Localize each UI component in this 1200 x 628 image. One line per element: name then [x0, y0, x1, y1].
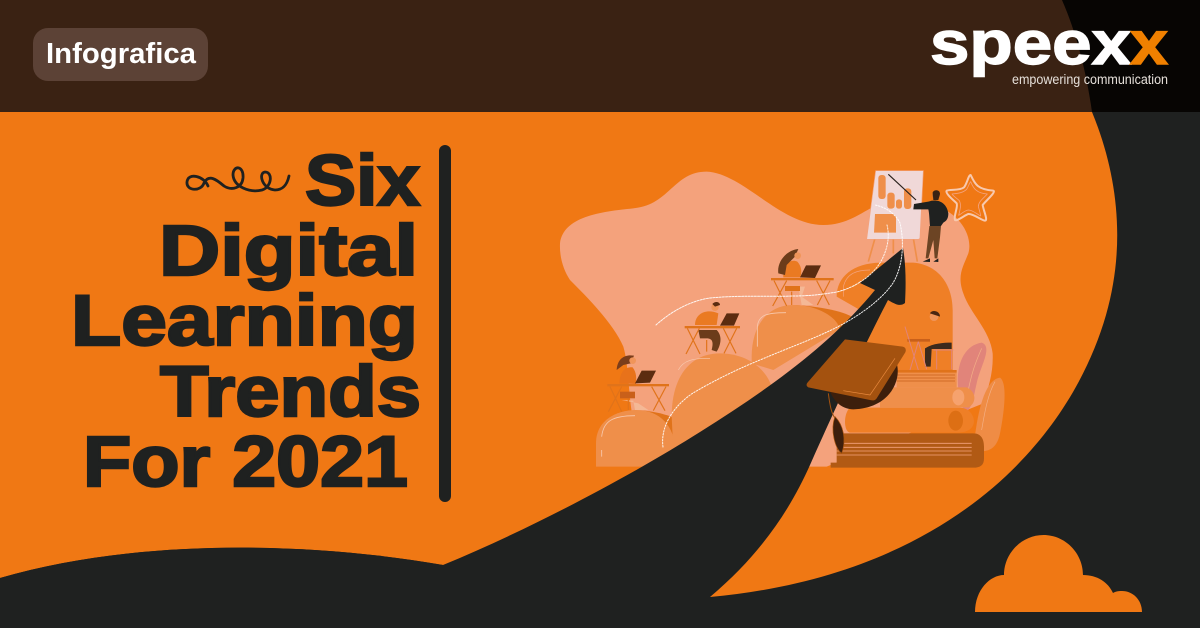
title: Six [305, 142, 420, 221]
background blob [560, 172, 993, 467]
hill 2 [672, 353, 773, 450]
graduation cap [807, 339, 906, 453]
right leaf plants [958, 343, 1005, 451]
hill 1 [596, 410, 697, 467]
dotted motion paths [656, 205, 902, 447]
logo: speexx: empowering communication [1012, 72, 1168, 87]
orange main panel [0, 112, 1117, 597]
illustration [560, 171, 1005, 468]
logo: speexx: x [1130, 9, 1168, 77]
student 1 at desk [607, 355, 669, 412]
logo: speexx: speex [930, 9, 1131, 77]
student 3 at desk [771, 249, 834, 306]
label pill: Infografica: Infografica [46, 38, 197, 70]
title [71, 142, 421, 502]
title flourish [187, 168, 289, 191]
presenter [913, 190, 948, 262]
vertical divider [439, 145, 451, 502]
title: Learning [71, 282, 418, 361]
title: Trends [160, 353, 421, 432]
label pill: Infografica [33, 28, 208, 81]
logo: speexx [930, 9, 1168, 87]
hill 3 [752, 305, 857, 370]
title: For 2021 [83, 423, 408, 502]
star [946, 175, 994, 221]
rising arrow [0, 248, 906, 628]
hill 4, large [837, 263, 953, 370]
book stack [831, 370, 984, 468]
title: Digital [159, 212, 418, 291]
presentation board [867, 171, 923, 262]
top band [0, 0, 1200, 112]
seated student on books [905, 311, 953, 370]
student 2 at desk [685, 302, 740, 354]
cloud [975, 535, 1142, 612]
